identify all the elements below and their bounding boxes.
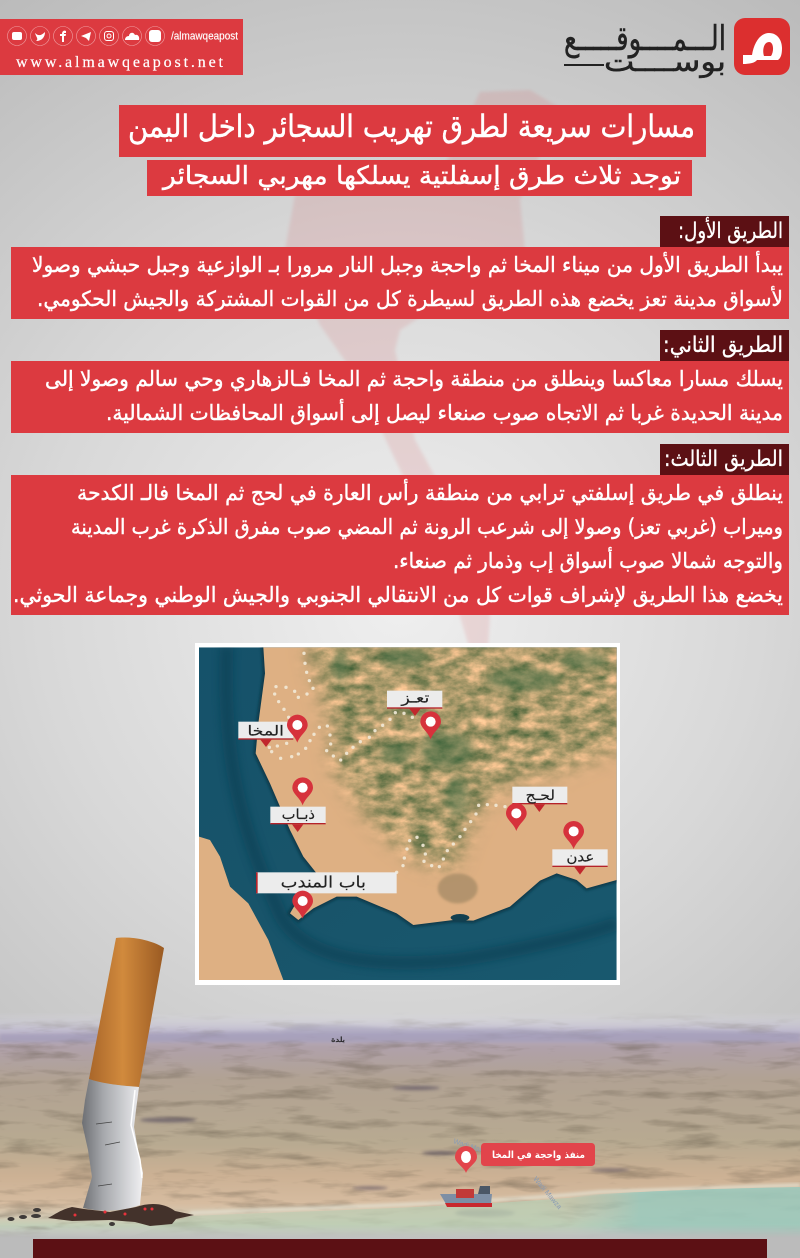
text block: third route: والتوجه شمالا صوب أسواق إب وذمار ثم صنعاء.: [393, 547, 783, 574]
social icons row: [8, 26, 164, 46]
label: Taiz: [387, 691, 442, 716]
pin: Mocha: [287, 715, 308, 743]
callout: Wahija port: [481, 1143, 595, 1166]
label: Bab al-Mandab: [256, 872, 397, 893]
coastal plain patch: [438, 873, 478, 903]
mountain texture: [299, 647, 617, 875]
logo wordmark: بوســــت: [604, 45, 726, 78]
pin: Dhubab: [292, 777, 313, 805]
label: Dhubab: [270, 807, 326, 832]
distant hills: [0, 1024, 800, 1042]
title: مسارات سريعة لطرق تهريب السجائر داخل اليمن: [128, 109, 695, 145]
label: Dhubab: ذبـاب: [282, 807, 315, 823]
panel: third route: [11, 444, 789, 615]
faded red map silhouette: [285, 90, 560, 650]
label: Lahj: لحـج: [526, 788, 555, 804]
pin: Taiz: [420, 711, 441, 739]
label: Aden: [552, 849, 608, 875]
heading: third route: الطريق الثالث:: [664, 447, 783, 472]
shallow water: [164, 1196, 598, 1231]
label: Taiz: تعـز: [400, 691, 429, 707]
text block: third route: ينطلق في طريق إسلفتي ترابي من منطقة رأس العارة في لحج ثم المخا فالـ الكدحة: [77, 479, 783, 506]
label: Lahj: [512, 787, 567, 812]
route dots: [268, 652, 507, 874]
cigarette paper: [82, 1079, 143, 1211]
footer bar: [33, 1239, 767, 1258]
land: [256, 647, 617, 925]
heading: second route: الطريق الثاني:: [663, 333, 783, 358]
text block: first route: يبدأ الطريق الأول من ميناء المخا ثم واحجة وجبل النار مرورا بـ الوازعية وجبل حبشي وصولا: [32, 251, 783, 278]
green highlands: [332, 647, 607, 817]
ash heap: [8, 1204, 194, 1226]
panel: second route: [11, 330, 789, 433]
text block: third route: يخضع هذا الطريق لإشراف قوات كل من الانتقالي الجنوبي والجيش الوطني وجماعة الحوثي.: [13, 583, 783, 607]
label: Mocha: المخا: [247, 723, 284, 739]
pin: Bab al-Mandab: [292, 891, 313, 919]
logo mark: [734, 18, 790, 75]
place label on landscape: بلدة: [331, 1036, 345, 1044]
text block: first route: [11, 247, 789, 319]
shoreline: [190, 1185, 800, 1213]
label: Bab al-Mandab: باب المندب: [281, 873, 366, 892]
website url: www.almawqeapost.net: [16, 54, 224, 71]
pin: landscape marker: [455, 1146, 477, 1173]
coastal landscape: [0, 1005, 800, 1240]
logo: [564, 18, 790, 78]
pin: Lahj: [506, 803, 527, 831]
subtitle: توجد ثلاث طرق إسفلتية يسلكها مهربي السجائر: [161, 161, 681, 191]
islands: [451, 914, 469, 921]
ship illustration: [440, 1186, 492, 1207]
text block: first route: لأسواق مدينة تعز يخضع هذه الطريق لسيطرة كل من القوات المشتركة والجيش الحكومي.: [37, 286, 783, 311]
map frame: [195, 643, 620, 985]
road labels: Wadi Mar: [452, 1138, 483, 1154]
text block: third route: [11, 475, 789, 615]
social media box: [0, 19, 243, 75]
label: Aden: عدن: [566, 850, 594, 866]
title: [119, 105, 706, 157]
text block: second route: مدينة الحديدة غربا ثم الاتجاه صوب صنعاء ليصل إلى أسواق المحافظات الشمالية.: [106, 399, 783, 426]
cigarette filter: [89, 937, 164, 1087]
African coast: [199, 837, 283, 980]
text block: second route: يسلك مسارا معاكسا وينطلق من منطقة واحجة ثم المخا فـالزهاري وحي سالم وصولا إلى: [45, 367, 783, 392]
logo wordmark: الـــمــــوقـــــع: [564, 19, 726, 59]
map of southwest Yemen: [199, 647, 617, 980]
panel: first route: [11, 216, 789, 319]
road labels: [452, 1138, 562, 1211]
callout: Wahija port: منفذ واحجة في المخا: [492, 1150, 585, 1161]
sea: [580, 1187, 800, 1236]
label: Mocha: [238, 722, 293, 747]
road labels: Wadi Mawza: [531, 1176, 562, 1211]
cigarette butt illustration: [8, 937, 194, 1226]
pin: Aden: [563, 821, 584, 849]
heading: first route: [660, 216, 789, 247]
logo wordmark: [564, 19, 726, 78]
text block: second route: [11, 361, 789, 433]
dark ground patches: [140, 1086, 630, 1217]
social handle: /almawqeapost: [171, 30, 238, 42]
